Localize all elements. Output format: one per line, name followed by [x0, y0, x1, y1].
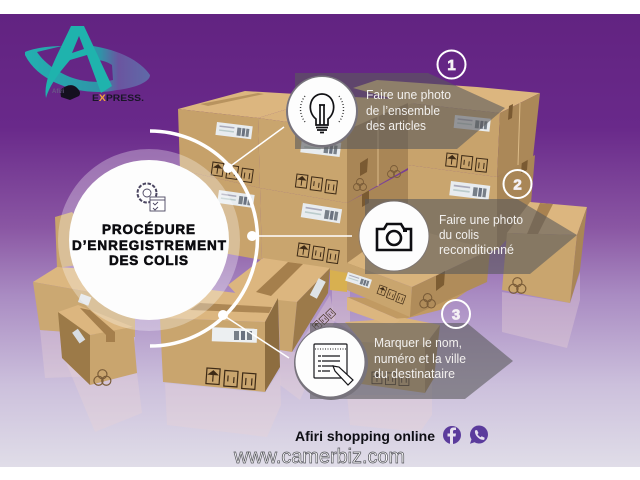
connector: step 1 — [223, 127, 284, 173]
box reflections — [40, 272, 580, 437]
cardboard boxes pile — [33, 80, 587, 393]
heading: central title: PROCÉDURE — [102, 222, 195, 237]
step 2 text: reconditionné — [439, 243, 514, 257]
logo — [25, 26, 150, 104]
panel: step 3 arrow — [310, 323, 513, 399]
step 1 text: des articles — [366, 119, 426, 133]
step number 3: 3 — [452, 306, 460, 324]
step number 3 — [442, 300, 470, 328]
step 2 text: du colis — [439, 228, 479, 242]
logo: EXPRESS. — [92, 93, 144, 104]
main circle — [69, 160, 229, 320]
icon: facebook — [443, 426, 461, 444]
box: small front left — [58, 305, 137, 385]
box: stack bottom row — [178, 155, 535, 292]
step 1 text: de l’ensemble — [366, 104, 440, 118]
icon: whatsapp — [470, 426, 488, 444]
heading: central title: DES COLIS — [109, 253, 188, 268]
watermark: www.camerbiz.com — [233, 446, 405, 468]
step number 2 — [504, 170, 532, 198]
step 3 text: numéro et la ville — [374, 352, 466, 366]
box: middle lower — [345, 225, 490, 320]
connector: step 3 — [218, 310, 289, 358]
panel: step 1 arrow — [295, 73, 505, 149]
box: under step 3 — [345, 297, 440, 393]
heading: central title: D’ENREGISTREMENT — [72, 238, 227, 253]
box: right single — [502, 202, 587, 303]
icon: camera circle — [358, 200, 430, 272]
icon: checklist and pencil circle — [294, 326, 368, 400]
heading: central title — [72, 222, 227, 268]
step number 1: 1 — [447, 57, 456, 74]
icon: gear and checklist — [138, 184, 165, 211]
box: front centre — [160, 288, 280, 392]
box: far left behind circle — [55, 212, 110, 268]
step 2 text — [439, 213, 523, 257]
panel: step 2 arrow — [365, 199, 577, 274]
footer: brand name: Afiri shopping online — [295, 428, 435, 444]
curved timeline arc — [150, 131, 257, 346]
step 3 text: du destinataire — [374, 367, 455, 381]
step 1 text: Faire une photo — [366, 88, 451, 102]
step 1 text — [366, 88, 451, 133]
step number 1 — [438, 50, 466, 78]
icon: lightbulb circle — [286, 76, 358, 148]
connector: step 2 — [247, 231, 352, 241]
box: stack top row — [178, 80, 540, 203]
main circle halo — [58, 149, 240, 331]
step 3 text — [374, 336, 466, 381]
box: rear left — [33, 267, 135, 337]
step 3 text: Marquer le nom, — [374, 336, 462, 350]
box: behind front box — [228, 258, 336, 352]
step 2 text: Faire une photo — [439, 213, 523, 227]
logo: Afiri — [52, 89, 64, 95]
step number 2: 2 — [513, 176, 522, 194]
